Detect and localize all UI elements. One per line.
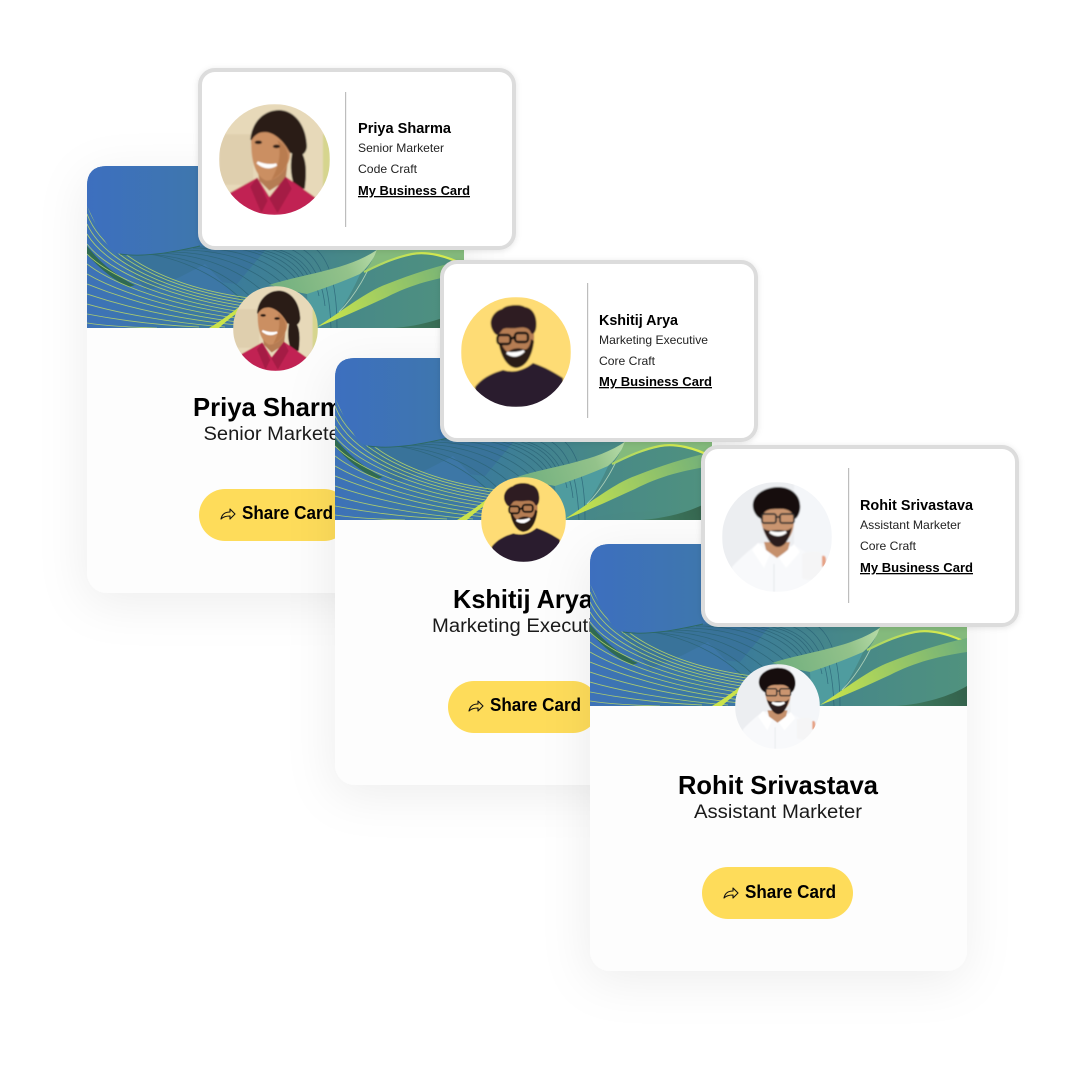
role: Rohit mini: Assistant Marketer <box>860 518 961 532</box>
avatar: Kshitij card <box>481 477 566 562</box>
button: Priya share card: Share Card <box>242 503 333 523</box>
card: Kshitij Arya <box>335 358 712 785</box>
button: Priya share card <box>199 489 350 541</box>
button: Rohit share card: Share Card <box>745 882 836 902</box>
name: Kshitij mini: Kshitij Arya <box>599 312 679 329</box>
button: Rohit share card <box>702 867 853 919</box>
portrait: Priya <box>219 104 330 215</box>
portrait: Rohit <box>722 482 832 592</box>
button: Kshitij share card: Share Card <box>490 695 581 715</box>
name: Kshitij card: Kshitij Arya <box>453 584 594 614</box>
card: Rohit Srivastava <box>590 544 967 971</box>
company: Kshitij mini: Core Craft <box>599 354 656 368</box>
avatar: Priya card <box>233 286 318 371</box>
banner: Rohit card <box>590 544 967 706</box>
card: Priya Sharma <box>87 166 464 593</box>
role: Rohit card: Assistant Marketer <box>694 802 863 823</box>
role: Priya mini: Senior Marketer <box>358 141 444 155</box>
avatar: Rohit card <box>735 664 820 749</box>
button: Kshitij share card <box>448 681 599 733</box>
banner: Priya card <box>87 166 464 328</box>
link: Rohit mini: My Business Card <box>860 560 973 575</box>
mini card: Kshitij Arya <box>442 262 756 440</box>
company: Rohit mini: Core Craft <box>860 539 917 553</box>
role: Kshitij mini: Marketing Executive <box>599 333 708 347</box>
name: Priya mini: Priya Sharma <box>358 120 452 137</box>
banner: Kshitij card <box>335 358 712 520</box>
link: Kshitij mini: My Business Card <box>599 374 712 389</box>
company: Priya mini: Code Craft <box>358 162 418 176</box>
role: Kshitij card: Marketing Executive <box>432 616 614 637</box>
mini card: Priya Sharma <box>200 70 514 248</box>
name: Rohit card: Rohit Srivastava <box>678 770 879 800</box>
link: Priya mini: My Business Card <box>358 183 470 198</box>
name: Rohit mini: Rohit Srivastava <box>860 497 974 514</box>
name: Priya card: Priya Sharma <box>193 392 358 422</box>
mini card: Rohit Srivastava <box>703 447 1017 625</box>
role: Priya card: Senior Marketer <box>204 424 347 445</box>
portrait: Kshitij <box>461 297 571 407</box>
